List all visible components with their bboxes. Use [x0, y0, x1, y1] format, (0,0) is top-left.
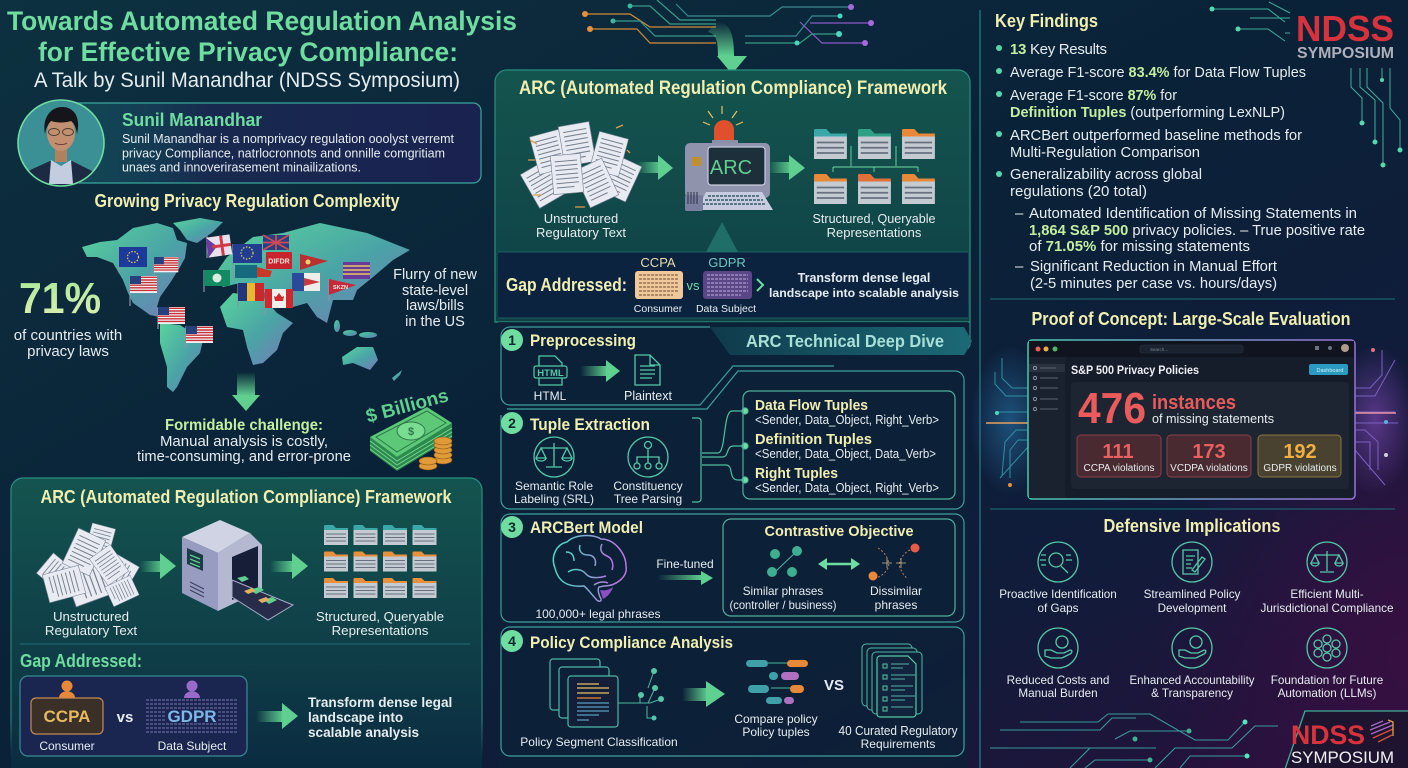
panel: key findings: Key Findings — [995, 11, 1098, 31]
implication: proactive identification: of Gaps — [1038, 602, 1079, 615]
panel: step 3 ARCBert model: 100,000+ legal phrases — [535, 607, 661, 621]
icon: billions of dollars: $ Billions — [364, 385, 451, 428]
panel: speaker card: Sunil Manandhar is a nomprivacy regulation ooolyst verremt — [122, 132, 455, 146]
box: tuple types: <Sender, Data_Object, Right_Verb> — [755, 413, 939, 427]
stat: CCPA violations — [1077, 435, 1161, 477]
banner: ARC technical deep dive: ARC Technical Deep Dive — [746, 331, 944, 351]
stat: 476 instances — [1078, 384, 1274, 433]
circuit lines: footer — [990, 714, 1278, 768]
icon: flags on map: DIFDR — [268, 258, 290, 266]
text: flurry of new laws: Flurry of new — [393, 267, 477, 283]
text: formidable challenge — [137, 417, 351, 465]
panel: step 1 preprocessing — [501, 327, 834, 405]
logo: NDSS symposium footer — [1285, 711, 1408, 768]
stat: 476 instances: of missing statements — [1152, 411, 1274, 426]
text: flurry of new laws: laws/bills — [406, 298, 464, 314]
box: contrastive objective — [723, 519, 955, 616]
icon: stack of regulation pages — [520, 121, 642, 208]
implication: future automation: Automation (LLMs) — [1278, 687, 1376, 700]
findings text: Multi-Regulation Comparison — [1010, 144, 1200, 161]
box: contrastive objective: Contrastive Objective — [764, 523, 914, 540]
icon: billions of dollars — [364, 385, 452, 471]
text: transform landscape — [308, 695, 452, 740]
arrow: HTML to plaintext — [580, 360, 620, 382]
text: flurry of new laws: state-level — [402, 283, 468, 299]
stat: GDPR violations: 192 — [1283, 441, 1317, 463]
labels: centre input and output: Structured, Queryable — [812, 211, 936, 226]
sidebar — [1029, 357, 1065, 498]
banner: ARC technical deep dive — [710, 327, 972, 355]
box: CCPA vs GDPR: vs — [117, 709, 133, 726]
arrow: gap to transform — [256, 703, 298, 729]
heading: gap addressed: Gap Addressed: — [20, 651, 142, 671]
labels: input and output: Representations — [332, 623, 429, 638]
heading: defensive implications: Defensive Implications — [1104, 516, 1280, 536]
panel: gap addressed band: Consumer — [634, 303, 683, 315]
panel: gap addressed band: Transform dense legal — [798, 271, 930, 285]
implication: multi-jurisdictional: Jurisdictional Compliance — [1260, 601, 1394, 615]
icon: structured tables — [814, 129, 935, 204]
bullets — [996, 45, 1002, 177]
box: tuple types: <Sender, Data_Object, Right_Verb> — [755, 481, 939, 495]
panel: step 4 policy compliance: Policy Compliance Analysis — [530, 634, 733, 652]
panel: gap addressed band: GDPR — [708, 255, 746, 270]
panel: step 3 ARCBert model: Fine-tuned — [656, 557, 714, 571]
panel: key findings — [995, 11, 1365, 292]
findings text: ARCBert outperformed baseline methods for — [1010, 127, 1302, 144]
panel: step 1 preprocessing: 1 — [508, 332, 516, 348]
panel: step 4 policy compliance — [501, 627, 964, 756]
implication: multi-jurisdictional: Efficient Multi- — [1290, 588, 1364, 601]
panel: gap addressed band: CCPA — [640, 255, 676, 270]
panel: step 2 tuple extraction: Tuple Extraction — [530, 416, 650, 434]
implication: proactive identification — [999, 542, 1117, 615]
panel: step 2 tuple extraction — [501, 371, 964, 509]
stat: 71 percent: of countries with — [14, 327, 122, 344]
icon: flags on map — [119, 234, 370, 348]
text: flurry of new laws: in the US — [405, 314, 465, 330]
implication: reduced costs — [1007, 628, 1109, 700]
title: for Effective Privacy Compliance: — [38, 37, 458, 67]
findings text: regulations (20 total) — [1010, 183, 1147, 200]
panel: speaker card: unaes and innoverirasement minailizations. — [122, 160, 361, 174]
circuit lines: dashboard sides — [970, 345, 1408, 495]
stat: VCDPA violations: VCDPA violations — [1170, 463, 1248, 474]
panel: step 3 ARCBert model: 3 — [508, 519, 516, 535]
labels: input and output: Regulatory Text — [45, 623, 137, 638]
arrow: computer to folders — [768, 155, 805, 180]
stat: GDPR violations: GDPR violations — [1263, 463, 1337, 474]
implication: reduced costs: Reduced Costs and — [1007, 674, 1109, 687]
stat: CCPA violations: CCPA violations — [1084, 463, 1154, 474]
implication: future automation — [1271, 628, 1383, 700]
findings text: 1,864 S&P 500 privacy policies. – True positive rate — [1029, 222, 1365, 239]
title — [7, 6, 517, 92]
panel: speaker card: privacy Compliance, natrlocronnots and onnille comgritiam — [122, 146, 445, 160]
box: CCPA vs GDPR: Data Subject — [158, 739, 227, 753]
box: tuple types — [743, 391, 955, 499]
stat: 71 percent: privacy laws — [27, 343, 109, 360]
box: contrastive objective: Similar phrases — [743, 585, 823, 598]
implication: streamlined policy — [1144, 542, 1241, 615]
findings text: 13 Key Results — [1010, 41, 1107, 58]
box: tuple types: <Sender, Data_Object, Data_Verb> — [755, 447, 936, 461]
panel: step 1 preprocessing: HTML — [534, 389, 567, 403]
panel: step 2 tuple extraction: Labeling (SRL) — [514, 492, 594, 506]
implication: proactive identification: Proactive Identification — [999, 588, 1117, 601]
stat: 71 percent: 71% — [19, 274, 101, 323]
implication: future automation: Foundation for Future — [1271, 674, 1383, 687]
icon: HTML file — [534, 356, 567, 385]
findings text: of 71.05% for missing statements — [1029, 238, 1250, 255]
findings text: Generalizability across global — [1010, 166, 1202, 183]
logo: NDSS symposium footer: SYMPOSIUM — [1291, 748, 1394, 767]
icon: flags on map: SKZN — [333, 285, 348, 291]
connector: bracket to tuples — [692, 408, 748, 502]
icon: billions of dollars: $ — [408, 426, 414, 438]
panel: gap addressed band — [498, 252, 968, 318]
panel: step 4 policy compliance: 4 — [508, 633, 516, 649]
panel: step 1 preprocessing: Preprocessing — [530, 332, 636, 350]
panel: ARC framework (centre): ARC (Automated Regulation Compliance) Framework — [519, 78, 947, 99]
icon: ARC computer with alarm — [685, 106, 773, 211]
arrow: fine-tuned — [657, 571, 713, 585]
box: tuple types: Definition Tuples — [755, 431, 872, 448]
arrow: machine to folders — [270, 553, 308, 579]
panel: dashboard: S&P 500 Privacy Policies — [1071, 365, 1199, 377]
logo: NDSS symposium top: NDSS — [1296, 8, 1394, 49]
panel: background of deep dive — [498, 322, 968, 768]
implication: streamlined policy: Streamlined Policy — [1144, 588, 1241, 601]
box: CCPA vs GDPR: Consumer — [39, 739, 95, 753]
text: transform landscape: landscape into — [308, 710, 403, 725]
stat: 476 instances: 476 — [1078, 384, 1146, 433]
panel: dashboard: Dashboard — [1317, 368, 1343, 374]
box: contrastive objective: phrases — [875, 598, 917, 612]
icon: speaker portrait — [18, 100, 104, 187]
panel: dashboard — [1028, 340, 1355, 499]
panel: step 4 policy compliance: 40 Curated Regulatory — [838, 723, 958, 738]
panel: speaker card: Sunil Manandhar — [122, 110, 262, 130]
arrow: text to computer — [637, 155, 673, 180]
text: flurry of new laws — [393, 267, 477, 330]
logo: NDSS symposium footer: NDSS — [1291, 720, 1365, 750]
findings text: – — [1015, 258, 1024, 275]
findings text: – — [1015, 205, 1024, 222]
text: formidable challenge: Manual analysis is costly, — [160, 433, 328, 450]
heading: growing complexity: Growing Privacy Regulation Complexity — [94, 191, 400, 211]
text: formidable challenge: time-consuming, and error-prone — [137, 449, 351, 465]
heading: proof of concept: Proof of Concept: Large-Scale Evaluation — [1032, 309, 1350, 329]
icon: policy documents — [550, 659, 664, 727]
icon: logo mark — [1370, 720, 1393, 742]
logo: NDSS symposium top: SYMPOSIUM — [1297, 45, 1394, 62]
icon: policy tuple pills — [746, 660, 808, 704]
arrow: down to challenge — [232, 372, 260, 411]
implication: accountability: Enhanced Accountability — [1130, 673, 1254, 687]
panel: speaker card — [18, 100, 481, 187]
icon: regulatory requirements — [862, 644, 922, 717]
labels: input and output: Structured, Queryable — [316, 609, 444, 624]
panel: step 3 ARCBert model — [501, 514, 964, 622]
icon: scales for semantic role labeling — [534, 437, 574, 477]
labels: centre input and output — [536, 211, 936, 240]
panel: dashboard: Search... — [1150, 347, 1168, 352]
arrow: text to machine — [140, 553, 176, 579]
stat: 476 instances: instances — [1152, 392, 1236, 414]
panel: step 1 preprocessing: Plaintext — [624, 389, 672, 403]
findings text: Automated Identification of Missing Statements in — [1029, 205, 1357, 222]
circuit lines: top centre — [582, 0, 874, 46]
panel: step 4 policy compliance: Compare policy — [734, 712, 818, 726]
panel: step 4 policy compliance: VS — [824, 677, 844, 694]
arrow: gap up to framework — [706, 222, 738, 252]
panel: ARC framework (left) — [11, 478, 482, 768]
box: tuple types: Right Tuples — [755, 465, 838, 482]
implication: accountability — [1130, 628, 1254, 700]
panel: gap addressed band: Data Subject — [696, 303, 756, 315]
labels: input and output — [45, 609, 444, 638]
icon: processing machine — [182, 520, 293, 620]
icon: brain — [553, 536, 626, 601]
text: transform landscape: scalable analysis — [308, 725, 419, 740]
findings text: (2-5 minutes per case vs. hours/days) — [1030, 275, 1277, 292]
circuit lines: top right — [1210, 2, 1402, 168]
icon: plaintext file — [635, 355, 660, 385]
panel: step 4 policy compliance: Policy Segment Classification — [520, 735, 678, 749]
stat: VCDPA violations — [1167, 435, 1251, 477]
stat: 71 percent — [14, 274, 122, 360]
box: CCPA vs GDPR: GDPR — [167, 707, 217, 726]
panel: step 4 policy compliance: Requirements — [861, 737, 935, 751]
box: contrastive objective: (controller / business) — [730, 598, 836, 612]
box: tuple types: Data Flow Tuples — [755, 397, 868, 414]
panel: gap addressed band: landscape into scalable analysis — [769, 286, 959, 300]
panel: gap addressed band: Gap Addressed: — [506, 275, 627, 295]
findings text: Average F1-score 83.4% for Data Flow Tuples — [1010, 64, 1306, 81]
findings text: Average F1-score 87% for — [1010, 87, 1177, 104]
labels: centre input and output: Unstructured — [544, 211, 618, 226]
title: A Talk by Sunil Manandhar (NDSS Symposium) — [34, 69, 460, 92]
icon: tree for constituency parsing — [628, 437, 668, 477]
box: contrastive objective: Dissimilar — [870, 584, 922, 598]
panel: step 2 tuple extraction: Tree Parsing — [614, 492, 682, 506]
stat: VCDPA violations: 173 — [1192, 441, 1226, 463]
box: CCPA vs GDPR — [20, 676, 247, 756]
panel: step 3 ARCBert model: ARCBert Model — [530, 519, 643, 537]
findings text — [1010, 41, 1365, 292]
labels: centre input and output: Representations — [827, 225, 922, 240]
text: formidable challenge: Formidable challenge: — [165, 417, 323, 434]
box: CCPA vs GDPR: CCPA — [44, 707, 90, 726]
implication: multi-jurisdictional — [1260, 542, 1394, 615]
panel: ARC framework (centre) — [495, 70, 970, 355]
arrow: segments to tuples — [682, 681, 725, 707]
implication: streamlined policy: Development — [1158, 602, 1227, 615]
arrow: down to framework — [708, 22, 747, 74]
title: Towards Automated Regulation Analysis — [7, 6, 517, 36]
panel: step 4 policy compliance: Policy tuples — [742, 725, 810, 739]
findings text: Definition Tuples (outperforming LexNLP) — [1010, 104, 1285, 121]
implication: accountability: & Transparency — [1151, 687, 1233, 700]
stat: CCPA violations: 111 — [1102, 441, 1134, 463]
panel: ARC framework (left): ARC (Automated Regulation Compliance) Framework — [40, 487, 452, 507]
icon: ARC computer with alarm: ARC — [710, 157, 752, 179]
text: transform landscape: Transform dense legal — [308, 695, 452, 710]
implication: reduced costs: Manual Burden — [1018, 687, 1098, 700]
labels: centre input and output: Regulatory Text — [536, 225, 626, 240]
stat: GDPR violations — [1258, 435, 1341, 477]
panel: step 2 tuple extraction: Semantic Role — [515, 479, 593, 493]
panel: gap addressed band: vs — [686, 278, 700, 293]
labels: input and output: Unstructured — [53, 609, 129, 624]
panel: step 2 tuple extraction: Constituency — [613, 479, 683, 493]
findings text: Significant Reduction in Manual Effort — [1030, 258, 1278, 275]
icon: HTML file: HTML — [537, 368, 564, 379]
icon: pile of papers — [36, 523, 139, 607]
panel: step 2 tuple extraction: 2 — [508, 415, 516, 431]
world map — [82, 218, 410, 392]
icon: structured folders — [324, 525, 436, 598]
